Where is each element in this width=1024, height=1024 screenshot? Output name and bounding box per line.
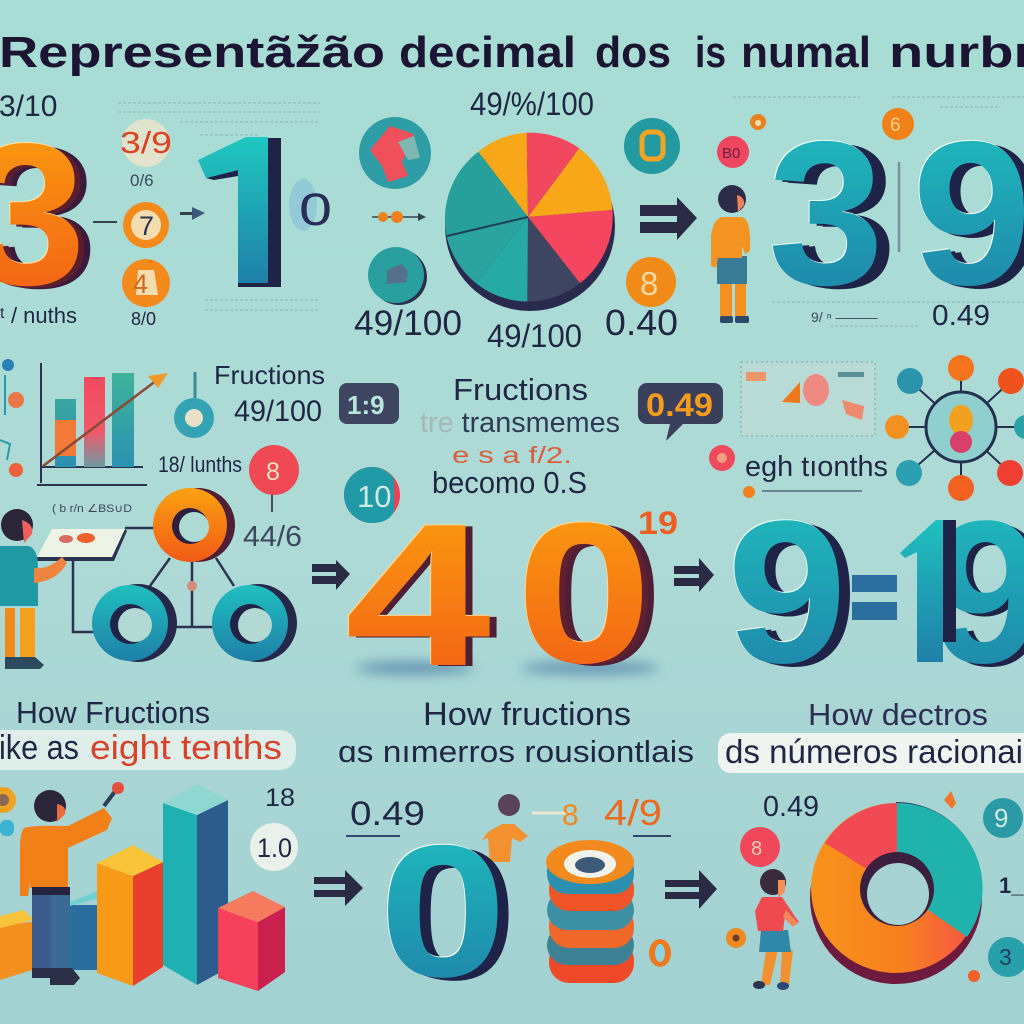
text transmemes: tre transmemes — [420, 407, 620, 439]
badge 1.9: 1:9 — [347, 390, 385, 420]
text 0.49: 0.49 — [763, 791, 819, 823]
icon teal circle — [174, 372, 214, 438]
faint fine-print lines — [118, 97, 1024, 326]
ring teal left — [92, 584, 177, 662]
fraction heading: 49/%/100 — [470, 86, 594, 122]
big digit 4: 4 — [345, 482, 491, 709]
icon teal 0 — [344, 467, 400, 523]
ring teal right — [212, 584, 297, 662]
heading: How dectros — [808, 697, 988, 732]
person pointing — [20, 782, 124, 985]
big digit 1 teal — [198, 137, 281, 287]
badge 1.9 — [339, 383, 399, 424]
text 0.49: 0.49 — [350, 795, 425, 833]
caption nurths: ᵗ / nuths — [0, 303, 77, 328]
person small — [482, 794, 570, 862]
text eighth: egh tıonths — [745, 451, 888, 483]
title: dos — [595, 28, 671, 77]
icon: teal circle — [368, 247, 427, 305]
callout 0.49 — [638, 383, 723, 441]
bar chart 3d — [0, 784, 285, 991]
title: nurbı — [889, 28, 1024, 77]
big digits 19 — [900, 520, 1024, 667]
person with board — [0, 509, 127, 669]
icon red 8 — [249, 445, 299, 512]
big digit 4: 4 — [352, 483, 498, 710]
small note text: ( b r/n ∠BS∪D — [52, 503, 132, 515]
icon: teal red circle — [359, 117, 431, 189]
icon teal bottom: 3 — [999, 944, 1012, 970]
heading: How fructions — [423, 696, 631, 732]
badge 1.0: 1.0 — [257, 833, 292, 863]
separator — [898, 162, 900, 252]
badge 3/0: 3/9 — [120, 125, 172, 160]
caption 0.49: 0.49 — [932, 300, 990, 332]
person — [711, 185, 750, 323]
arrows — [93, 207, 205, 223]
pill — [0, 729, 296, 770]
big digit 0: 0 — [378, 805, 506, 1015]
left icon — [0, 787, 16, 836]
arrow — [314, 870, 363, 906]
title: decimal — [399, 28, 576, 77]
big digit 3 teal: 3 — [767, 98, 883, 327]
text 3 4/9: 8 — [562, 799, 579, 832]
big digit 3 teal: 3 — [775, 101, 891, 330]
arrow — [640, 197, 697, 240]
text 3 4/9: 4/9 — [604, 792, 662, 833]
big digit 4: 4 — [344, 481, 490, 708]
icon teal D — [624, 118, 680, 174]
icon red badge: B0 — [722, 145, 740, 162]
donut chart — [810, 802, 983, 984]
title: numal — [741, 28, 871, 77]
arrow — [312, 560, 350, 590]
badge 3/0 — [120, 119, 172, 167]
badge 4: 4 — [133, 269, 148, 299]
big digits 19: 1 — [875, 480, 972, 707]
icon teal 9: 9 — [994, 803, 1008, 833]
icon teal 0: 10 — [357, 479, 391, 514]
icon red badge — [717, 136, 749, 168]
text blurred: e s a f/2. — [452, 442, 572, 468]
panel: bottom right — [718, 697, 1024, 990]
big digit 3 teal: 3 — [768, 99, 884, 328]
title — [0, 28, 1024, 77]
small note line — [743, 486, 862, 498]
title: Representãžão — [0, 28, 385, 77]
caption left: 49/100 — [354, 304, 462, 343]
text 18/lunths: 18/ lunths — [158, 452, 242, 477]
title: is — [695, 28, 726, 77]
icon orange circle: 6 — [890, 115, 901, 136]
caption small: 9/ ⁿ ——— — [811, 309, 878, 325]
text 0/6: 0/6 — [130, 171, 154, 190]
pill: ike as — [0, 729, 79, 767]
small left icon — [0, 359, 24, 477]
shadow under digits — [355, 662, 660, 674]
stacked discs — [546, 840, 634, 983]
small 0 — [289, 179, 332, 235]
big digit 0: 0 — [515, 481, 651, 704]
icon orange 8 — [626, 257, 676, 307]
red dot icon — [709, 445, 735, 471]
text 44/6: 44/6 — [243, 521, 302, 553]
superscript 19: 19 — [638, 505, 678, 541]
badge 1.0 — [250, 823, 298, 871]
text 18: 18 — [265, 784, 295, 812]
big digit 9: 9 — [738, 482, 858, 709]
icon teal bottom — [988, 937, 1024, 977]
panel: bottom left — [0, 695, 363, 991]
big digit 0: 0 — [522, 483, 658, 706]
person child — [753, 869, 799, 990]
icon red 8: 8 — [266, 458, 280, 486]
bar chart — [37, 363, 168, 485]
text Fructions: Fructions — [453, 372, 588, 407]
icon orange 8: 8 — [640, 265, 658, 302]
big digit 9 teal: 9 — [911, 98, 1024, 327]
big digit 9: 9 — [733, 481, 853, 708]
big digit 9 teal: 9 — [912, 99, 1024, 328]
panel: top right figures — [711, 98, 1024, 332]
text 0.40: 0.40 — [605, 302, 678, 343]
orange small icon — [649, 939, 671, 967]
big digit 0: 0 — [516, 482, 652, 705]
arrow — [674, 558, 714, 592]
big digit 1 teal: 1 — [180, 103, 291, 326]
text Fructions: Fructions — [214, 360, 325, 390]
callout 0.49: 0.49 — [646, 387, 713, 423]
badge 7 — [123, 202, 169, 248]
pill: eight tenths — [90, 729, 282, 767]
icon orange circle — [882, 108, 914, 140]
panel: top left fraction — [0, 90, 332, 330]
text 3 4/9 — [562, 792, 671, 837]
text become: becomo 0.S — [432, 465, 587, 500]
red badge — [740, 827, 780, 867]
big digit 3 teal: 3 — [781, 102, 897, 331]
text 49/100: 49/100 — [234, 395, 322, 428]
pill: ds números racionai — [725, 733, 1023, 770]
big digit 9: 9 — [726, 478, 846, 705]
subheading: ɑs nımerros rousiontlais — [338, 734, 694, 769]
panel: top centre pie — [354, 86, 697, 354]
icon small orange — [750, 114, 766, 130]
caption bottom: 49/100 — [487, 318, 582, 354]
big digit 9: 9 — [727, 479, 847, 706]
ring orange — [153, 488, 235, 562]
heading: How Fructions — [16, 695, 210, 730]
orange bottom dot — [968, 970, 980, 982]
big digit 0: 0 — [390, 809, 518, 1019]
small orange mark — [944, 791, 956, 809]
big digit 0: 0 — [528, 484, 664, 707]
icon teal 9 — [983, 798, 1023, 838]
badge 4 — [122, 259, 170, 307]
caption 8/0: 8/0 — [131, 309, 156, 329]
network diagram — [885, 355, 1024, 501]
pie chart — [445, 133, 615, 311]
note box — [741, 362, 875, 436]
panel: middle right — [734, 355, 1024, 667]
badge 7: 7 — [139, 211, 154, 241]
red badge: 8 — [751, 838, 762, 860]
equals sign — [852, 575, 897, 620]
label: 3/10: 3/10 — [0, 90, 57, 123]
small arrow — [372, 211, 426, 223]
small 0: 0 — [299, 184, 332, 235]
big digit 0: 0 — [385, 808, 513, 1018]
big digit 0: 0 — [379, 806, 507, 1016]
panel: middle centre — [339, 372, 735, 710]
arrow — [665, 870, 717, 909]
links — [73, 528, 234, 632]
panel: middle left chart — [0, 359, 350, 669]
orange dot — [726, 928, 746, 948]
panel: bottom centre — [338, 696, 717, 1019]
